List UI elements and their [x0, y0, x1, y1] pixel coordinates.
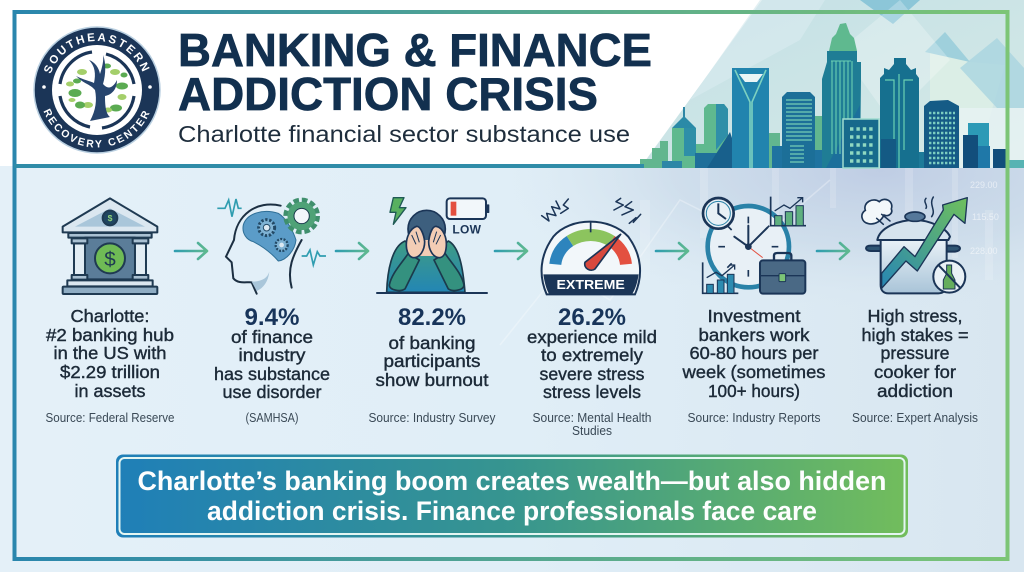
icon: stress gauge	[542, 198, 641, 294]
icon: brain with gears	[217, 199, 326, 294]
stat 3: 82.2%: show burnout	[376, 370, 489, 390]
arrow 3	[495, 243, 527, 259]
stat 5: investment bankers hours: Investment	[708, 306, 801, 326]
stat 1: Charlotte banking hub: Charlotte:	[70, 306, 150, 326]
brain	[243, 211, 296, 261]
callout banner: Charlotte’s banking boom creates wealth—but also hidden	[138, 466, 886, 496]
stat 4: 26.2%: stress levels	[543, 382, 641, 402]
building: spiked tower	[880, 58, 924, 168]
stat 5: investment bankers hours	[681, 306, 826, 425]
stat 1: Charlotte banking hub: Source: Federal Reserve	[46, 411, 175, 425]
arrow 2	[336, 243, 368, 259]
gauge label	[543, 274, 639, 294]
stat 2: 9.4%	[214, 304, 330, 425]
rising arrow	[882, 198, 967, 288]
skyline backdrop	[640, 0, 1024, 168]
handles	[866, 246, 960, 252]
person body	[387, 241, 465, 292]
building: green block	[662, 104, 742, 168]
desk	[376, 292, 488, 294]
logo text bottom: RECOVERY CENTER	[44, 108, 150, 148]
arrow 5	[817, 243, 849, 259]
chart top	[771, 197, 806, 226]
icon: bank: $	[104, 248, 116, 271]
stat 6: pressure cooker	[852, 306, 978, 425]
stat 6: pressure cooker: pressure	[880, 343, 950, 363]
page background: 115.50	[972, 212, 999, 222]
stat 5: investment bankers hours: 100+ hours)	[708, 381, 800, 401]
stat 4: 26.2%	[527, 304, 657, 438]
icon: burnout figure	[376, 198, 489, 294]
stat 3: 82.2%: 82.2%	[398, 304, 466, 331]
stat 2: 9.4%: (SAMHSA)	[246, 411, 298, 425]
page background: 229.00	[970, 180, 998, 190]
stat 1: Charlotte banking hub: $2.29 trillion	[60, 362, 160, 382]
steam cloud	[862, 199, 892, 224]
briefcase	[760, 253, 805, 294]
title: BANKING & FINANCE	[178, 24, 652, 76]
stat 1: Charlotte banking hub: #2 banking hub	[46, 325, 174, 345]
stat 5: investment bankers hours: Source: Industry Reports	[688, 411, 820, 425]
stat 5: investment bankers hours: week (sometimes	[681, 362, 826, 382]
logo arcs	[60, 52, 134, 128]
building: grid block	[924, 100, 959, 168]
stat 5: investment bankers hours: 60-80 hours per	[690, 343, 819, 363]
icon: bank	[63, 198, 157, 294]
building: striped block	[772, 92, 823, 168]
stat 4: 26.2%: to extremely	[541, 345, 643, 365]
building: window block	[843, 119, 879, 168]
building: right cluster	[963, 123, 1024, 168]
icon: pressure cooker	[862, 197, 967, 293]
arms	[389, 253, 464, 291]
stat 4: 26.2%: severe stress	[540, 364, 645, 384]
head	[408, 210, 445, 248]
stat 4: 26.2%: Studies	[572, 424, 612, 438]
stat 3: 82.2%: Source: Industry Survey	[368, 411, 496, 425]
stat 6: pressure cooker: cooker for	[874, 362, 956, 382]
title	[178, 24, 652, 120]
stat 2: 9.4%: of finance	[231, 327, 313, 347]
logo	[33, 26, 161, 154]
header band	[0, 0, 1024, 166]
needle	[585, 234, 621, 270]
stat 5: investment bankers hours: bankers work	[698, 325, 810, 345]
pulse right	[302, 250, 326, 265]
stat 6: pressure cooker: Source: Expert Analysis	[852, 411, 978, 425]
page background: 228.00	[970, 246, 998, 256]
building: spire tower	[672, 107, 696, 168]
logo text top: SOUTHEASTERN	[44, 33, 150, 74]
logo tree	[76, 55, 117, 121]
icon: clock and briefcase	[703, 197, 806, 294]
building: crown tower	[822, 23, 861, 168]
stat 3: 82.2%: participants	[384, 351, 481, 371]
skyline	[640, 23, 1024, 168]
stat 6: pressure cooker: High stress,	[868, 306, 962, 326]
battery: LOW	[452, 223, 482, 237]
gear	[286, 201, 317, 231]
stat 1: Charlotte banking hub: in the US with	[54, 343, 166, 363]
building: sail tower	[732, 68, 780, 168]
icon: stress gauge: EXTREME	[556, 278, 625, 292]
stat 4: 26.2%: 26.2%	[558, 304, 626, 331]
large clock	[708, 206, 789, 287]
lightning	[390, 198, 406, 224]
stat 6: pressure cooker: high stakes =	[862, 325, 968, 345]
chart bottom	[703, 262, 738, 293]
stat 2: 9.4%: has substance	[214, 364, 330, 384]
gauge body	[542, 222, 640, 294]
logo leaves	[66, 64, 128, 112]
stat 2: 9.4%: industry	[238, 345, 306, 365]
arrow 4	[656, 243, 688, 259]
head outline	[226, 204, 302, 294]
stat 2: 9.4%: use disorder	[222, 382, 322, 402]
gauge arcs	[555, 241, 570, 264]
no-bottle sign	[933, 261, 965, 293]
stat 1: Charlotte banking hub: in assets	[74, 381, 146, 401]
stat 2: 9.4%: 9.4%	[244, 304, 300, 331]
stat 3: 82.2%	[368, 304, 496, 425]
title: ADDICTION CRISIS	[178, 68, 598, 120]
hands	[406, 226, 446, 258]
stat 1: Charlotte banking hub	[46, 306, 175, 425]
lid	[877, 220, 950, 240]
icon: bank: $	[108, 213, 113, 223]
arrow 1	[175, 243, 207, 259]
pulse left	[217, 199, 242, 217]
zigzags	[542, 198, 641, 223]
stat 4: 26.2%: experience mild	[527, 327, 657, 347]
callout banner: addiction crisis. Finance professionals face care	[207, 496, 817, 526]
subtitle: Charlotte financial sector substance use	[178, 121, 630, 147]
pot	[881, 240, 947, 293]
stat 6: pressure cooker: addiction	[877, 381, 953, 401]
callout banner	[116, 454, 908, 538]
stat 4: 26.2%: Source: Mental Health	[532, 411, 652, 425]
stat 3: 82.2%: of banking	[388, 333, 476, 353]
small clock	[703, 198, 734, 229]
